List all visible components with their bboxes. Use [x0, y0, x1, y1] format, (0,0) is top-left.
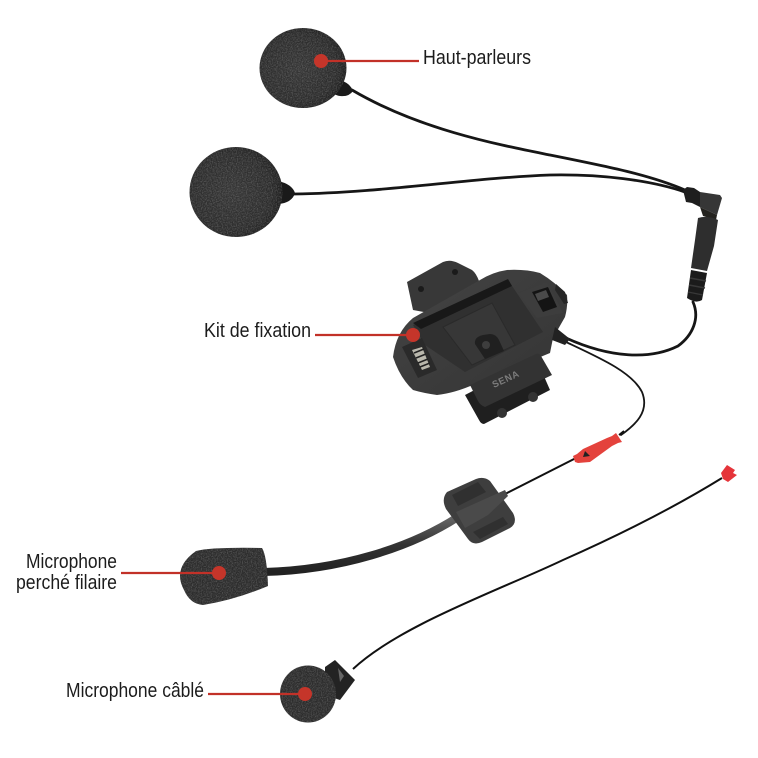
red plug — [721, 465, 737, 482]
thin lead out of connector — [619, 431, 624, 435]
plate recess — [413, 280, 543, 372]
icon: mounting plate — [393, 261, 570, 424]
callout: Microphone perché filaire: perché filaire — [16, 572, 117, 594]
plate tab — [407, 261, 479, 315]
front clip with logo — [470, 354, 552, 407]
contact pins — [402, 338, 437, 378]
connector port — [518, 282, 563, 318]
side clip — [465, 358, 550, 424]
slider pad — [444, 478, 515, 543]
foam — [280, 666, 336, 722]
mic wire — [505, 458, 576, 494]
callout: Kit de fixation — [204, 320, 420, 342]
callout: Microphone perché filaire: Microphone — [26, 551, 117, 573]
mic boom arm — [264, 517, 458, 572]
callout: Microphone câblé: Microphone câblé — [66, 680, 204, 702]
mic wire — [353, 478, 722, 669]
callout: Haut-parleurs: Haut-parleurs — [423, 47, 531, 69]
callout: Kit de fixation: Kit de fixation — [204, 320, 311, 342]
icon: speaker 1 — [260, 28, 353, 108]
icon: boom microphone — [180, 431, 624, 605]
logo: SENA — [491, 369, 521, 391]
red inline connector — [573, 433, 622, 463]
plate body — [393, 270, 567, 395]
icon: audio connector — [683, 187, 722, 302]
icon: speaker 2 — [190, 147, 295, 237]
icon: wired microphone — [280, 465, 737, 722]
callout: Haut-parleurs — [314, 47, 531, 69]
foam windscreen — [180, 548, 268, 605]
callout: Microphone câblé — [66, 680, 312, 702]
cables: speaker wires — [294, 90, 696, 435]
callout: Microphone perché filaire — [16, 551, 226, 594]
side button — [555, 284, 568, 304]
mic clip — [325, 660, 355, 700]
